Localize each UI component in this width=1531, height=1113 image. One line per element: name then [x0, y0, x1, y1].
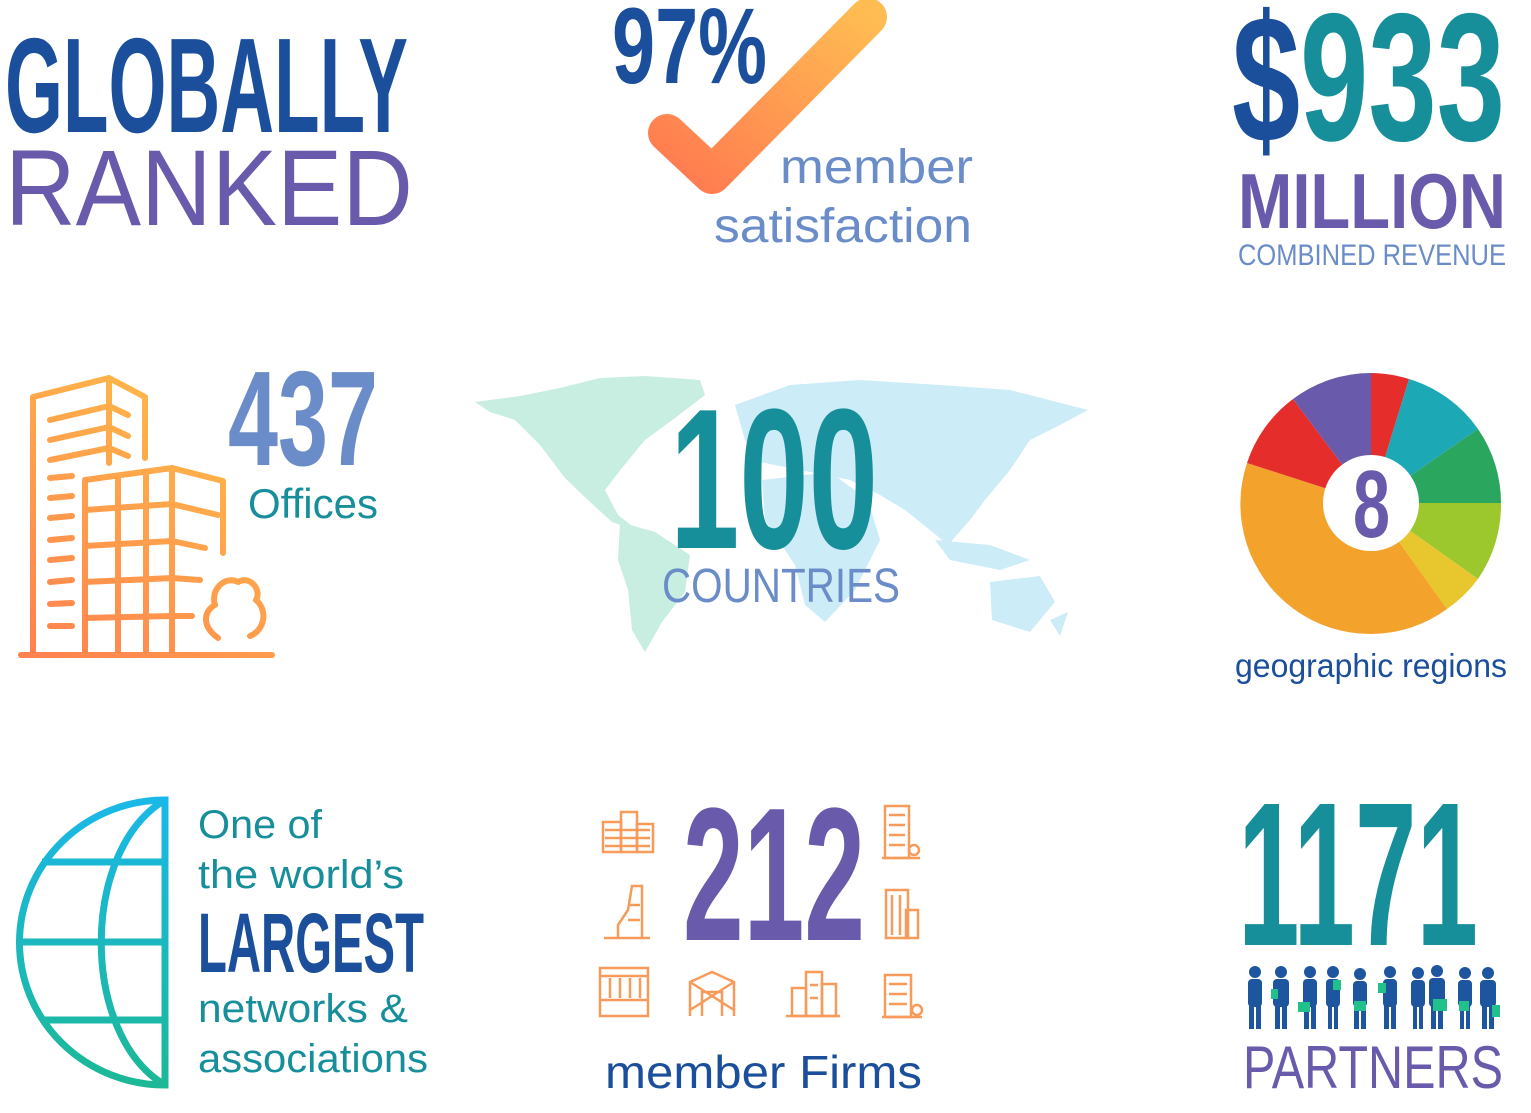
stat: offices — [228, 343, 378, 527]
stat: offices: 437 — [228, 343, 378, 494]
stat: offices: Offices — [248, 480, 378, 527]
chart: geographic regions pie: 8 — [1353, 451, 1390, 558]
world map — [475, 376, 1088, 652]
stat: member firms — [605, 769, 922, 1098]
icon: checkmark — [667, 17, 868, 175]
icons: small buildings — [600, 806, 922, 1017]
chart: geographic regions pie — [1240, 373, 1501, 634]
stat: member satisfaction: satisfaction — [714, 200, 972, 253]
label: geographic regions: geographic regions — [1235, 647, 1507, 684]
text: largest networks: networks & — [198, 987, 408, 1031]
stat: countries: 100 — [670, 368, 878, 591]
text: largest networks: LARGEST — [198, 896, 424, 990]
title: globally ranked: GLOBALLY — [5, 10, 408, 161]
stat: countries: COUNTRIES — [662, 560, 900, 613]
text: largest networks: the world’s — [198, 853, 404, 897]
stat: combined revenue — [1232, 0, 1506, 272]
stat: countries — [662, 368, 900, 613]
text: largest networks — [198, 803, 428, 1081]
stat: member firms: 212 — [683, 769, 865, 981]
stat: member satisfaction: member — [780, 141, 973, 194]
stat: member satisfaction — [612, 0, 973, 253]
icon: people silhouettes — [1248, 965, 1500, 1029]
title: globally ranked: RANKED — [5, 127, 413, 248]
icon: office buildings — [21, 378, 272, 655]
text: largest networks: associations — [198, 1037, 428, 1081]
stat: partners — [1238, 760, 1503, 1101]
stat: member firms: member Firms — [605, 1046, 922, 1098]
icon: globe — [19, 800, 165, 1085]
text: largest networks: One of — [198, 803, 323, 847]
title: globally ranked — [5, 10, 413, 248]
